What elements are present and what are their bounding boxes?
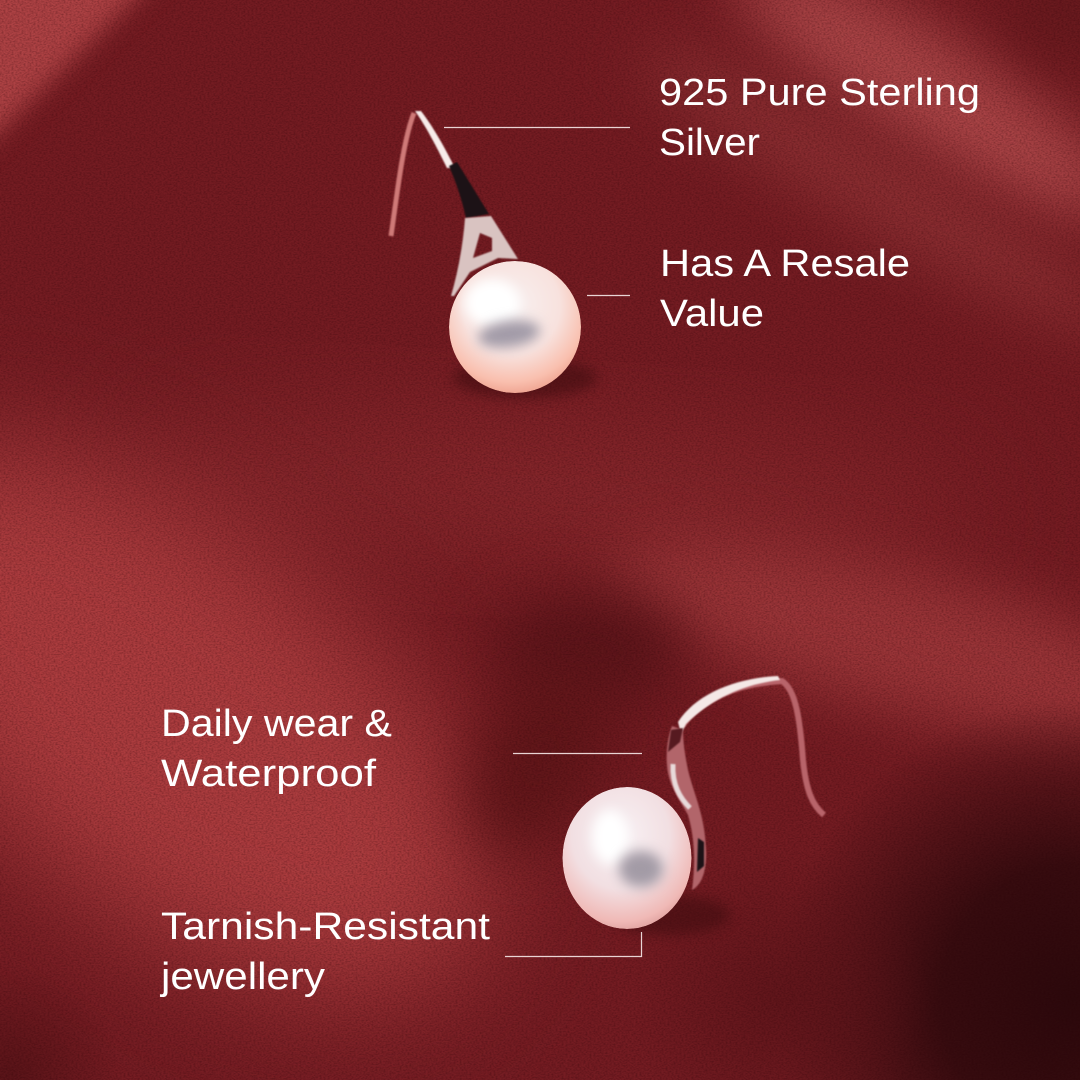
- label: Tarnish-Resistant jewellery: jewellery: [160, 956, 325, 998]
- shadow under bottom pearl: [610, 895, 730, 935]
- label: Has A Resale Value: Value: [660, 293, 764, 335]
- pearl: top: [449, 261, 581, 393]
- hook: bottom dark facet: [697, 838, 704, 872]
- label: Daily wear & Waterproof: Waterproof: [161, 753, 376, 795]
- hook: top right arm: [415, 111, 455, 168]
- leader line: tarnish resistant: [505, 932, 642, 956]
- leader line: resale value: [587, 294, 630, 296]
- leader line: daily wear: [513, 752, 642, 754]
- earring: top: [391, 111, 597, 398]
- label: Tarnish-Resistant jewellery: Tarnish-Resistant: [161, 906, 490, 948]
- label: Daily wear & Waterproof: Daily wear &: [161, 703, 392, 745]
- label: 925 Pure Sterling Silver: Silver: [659, 122, 760, 164]
- hook: top left arm: [391, 113, 414, 236]
- pearl: bottom: [562, 787, 692, 929]
- label: 925 Pure Sterling Silver: 925 Pure Sterling: [659, 72, 980, 114]
- hook: bottom stem highlight: [673, 764, 690, 808]
- earring: bottom: [562, 676, 824, 935]
- hook: bottom corner shadow: [668, 728, 683, 752]
- hook: bottom arc and right arm: [682, 681, 824, 815]
- label: Has A Resale Value: Has A Resale: [660, 243, 910, 285]
- hook: bottom highlight: [678, 676, 780, 734]
- leader line: 925 silver: [444, 126, 630, 128]
- shadow under top pearl: [453, 358, 597, 398]
- hook: top dark facet: [449, 162, 489, 218]
- hook: top bail: [451, 216, 518, 296]
- hook: bottom stem: [667, 726, 706, 890]
